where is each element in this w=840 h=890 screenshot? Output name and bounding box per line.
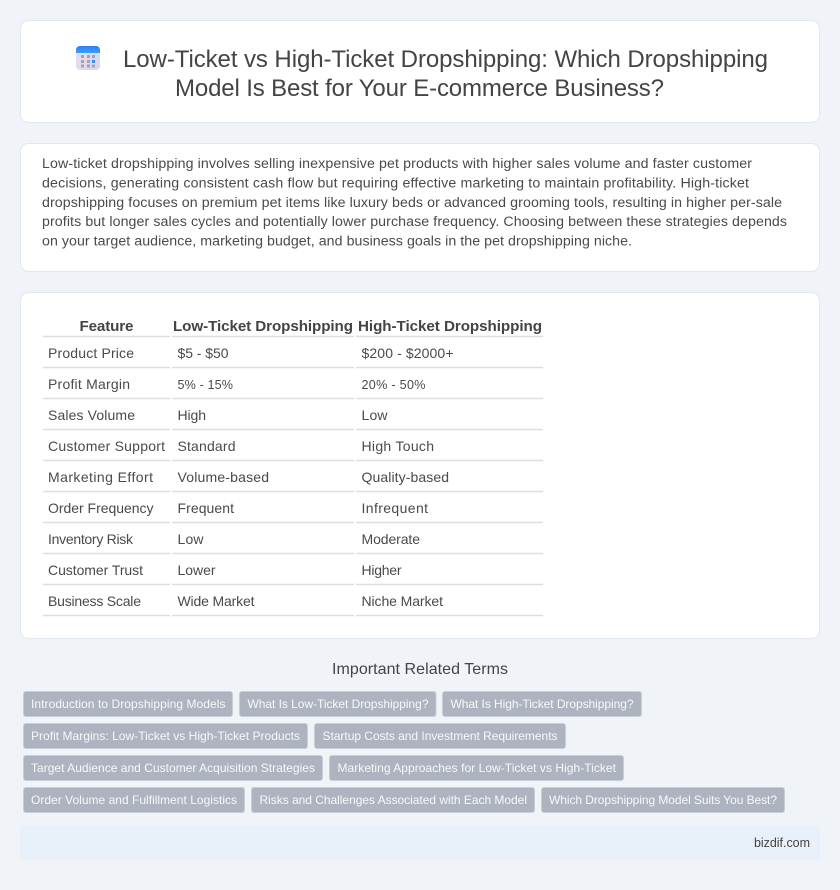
row: inventory risk: Moderate <box>362 531 420 547</box>
text block: description <box>42 156 787 250</box>
text block: description: profits but longer sales cycles and potentially lower purchase frequency. Choosing between these strategies depends <box>42 214 787 230</box>
tags: related terms <box>24 692 784 812</box>
tag <box>240 692 436 716</box>
heading: important related terms: Important Related Terms <box>332 661 508 678</box>
tag <box>24 788 244 812</box>
row: product price: $5 - $50 <box>178 345 229 361</box>
row: product price: $200 - $2000+ <box>362 345 454 361</box>
tag: Risks and Challenges Associated with Each Model <box>260 793 527 807</box>
row: product price: Product Price <box>48 345 134 361</box>
row: product price <box>48 345 454 361</box>
row: sales volume: Low <box>362 407 388 423</box>
row: customer trust: Lower <box>178 562 216 578</box>
row: marketing effort: Quality-based <box>362 469 449 485</box>
row: business scale: Business Scale <box>48 593 141 609</box>
row: marketing effort <box>48 469 449 485</box>
row: inventory risk <box>48 531 420 547</box>
row: customer trust <box>48 562 402 578</box>
panel: header <box>20 20 820 122</box>
row: customer support: High Touch <box>362 438 434 454</box>
panel: comparison table <box>20 292 820 638</box>
tag: Marketing Approaches for Low-Ticket vs High-Ticket <box>338 761 617 775</box>
tag: Introduction to Dropshipping Models <box>31 697 226 711</box>
table header: Low-Ticket Dropshipping <box>173 318 353 335</box>
icon: calendar <box>76 46 100 70</box>
row: customer trust: Customer Trust <box>48 562 143 578</box>
text block: description: decisions, generating consistent cash flow but requiring effective marketing to maintain profitability. High-ticket <box>42 176 749 192</box>
row: business scale <box>48 593 443 609</box>
tag: Profit Margins: Low-Ticket vs High-Ticket Products <box>31 729 300 743</box>
text block: description: dropshipping focuses on premium pet items like luxury beds or advanced grooming tools, resulting in higher per-sale <box>42 195 782 211</box>
row: profit margin: 20% - 50% <box>362 378 426 392</box>
tag: Order Volume and Fulfillment Logistics <box>31 793 237 807</box>
row: customer support <box>48 438 434 454</box>
row: profit margin: Profit Margin <box>48 376 130 392</box>
tag <box>542 788 784 812</box>
footer <box>20 826 820 860</box>
row: sales volume: High <box>178 407 206 423</box>
tag <box>442 692 642 716</box>
row: sales volume <box>48 407 388 423</box>
tag: Target Audience and Customer Acquisition Strategies <box>31 761 315 775</box>
row: profit margin: 5% - 15% <box>178 378 233 392</box>
row: marketing effort: Volume-based <box>178 469 269 485</box>
row: business scale: Niche Market <box>362 593 443 609</box>
text block: description: Low-ticket dropshipping involves selling inexpensive pet products with higher sales volume and faster customer <box>42 156 752 172</box>
table header: High-Ticket Dropshipping <box>358 318 542 335</box>
tag: What Is Low-Ticket Dropshipping? <box>248 697 429 711</box>
tag: Startup Costs and Investment Requirements <box>322 729 558 743</box>
row: order frequency: Frequent <box>178 500 234 516</box>
tag <box>24 692 232 716</box>
text block: description: on your target audience, marketing budget, and business goals in the pet dropshipping niche. <box>42 234 632 250</box>
tag <box>24 756 322 780</box>
panel: description <box>20 144 820 272</box>
table header: Feature <box>80 318 134 335</box>
title: Low-Ticket vs High-Ticket Dropshipping: Which Dropshipping <box>123 46 768 73</box>
row: customer support: Standard <box>178 438 236 454</box>
tag: What Is High-Ticket Dropshipping? <box>450 697 634 711</box>
tag: Which Dropshipping Model Suits You Best? <box>549 793 777 807</box>
row: order frequency <box>48 500 428 516</box>
row: customer support: Customer Support <box>48 438 165 454</box>
tag <box>330 756 624 780</box>
tag <box>252 788 534 812</box>
row: inventory risk: Low <box>178 531 204 547</box>
tag <box>24 724 308 748</box>
row: profit margin <box>48 376 426 392</box>
tag <box>314 724 566 748</box>
footer: bizdif.com <box>754 836 810 850</box>
row: business scale: Wide Market <box>178 593 255 609</box>
table header <box>80 318 542 335</box>
row: order frequency: Infrequent <box>362 500 428 516</box>
row: order frequency: Order Frequency <box>48 500 154 516</box>
row: inventory risk: Inventory Risk <box>48 531 134 547</box>
row: customer trust: Higher <box>362 562 402 578</box>
row: marketing effort: Marketing Effort <box>48 469 153 485</box>
row: sales volume: Sales Volume <box>48 407 135 423</box>
title: Model Is Best for Your E-commerce Business? <box>175 75 664 102</box>
title <box>123 46 768 102</box>
